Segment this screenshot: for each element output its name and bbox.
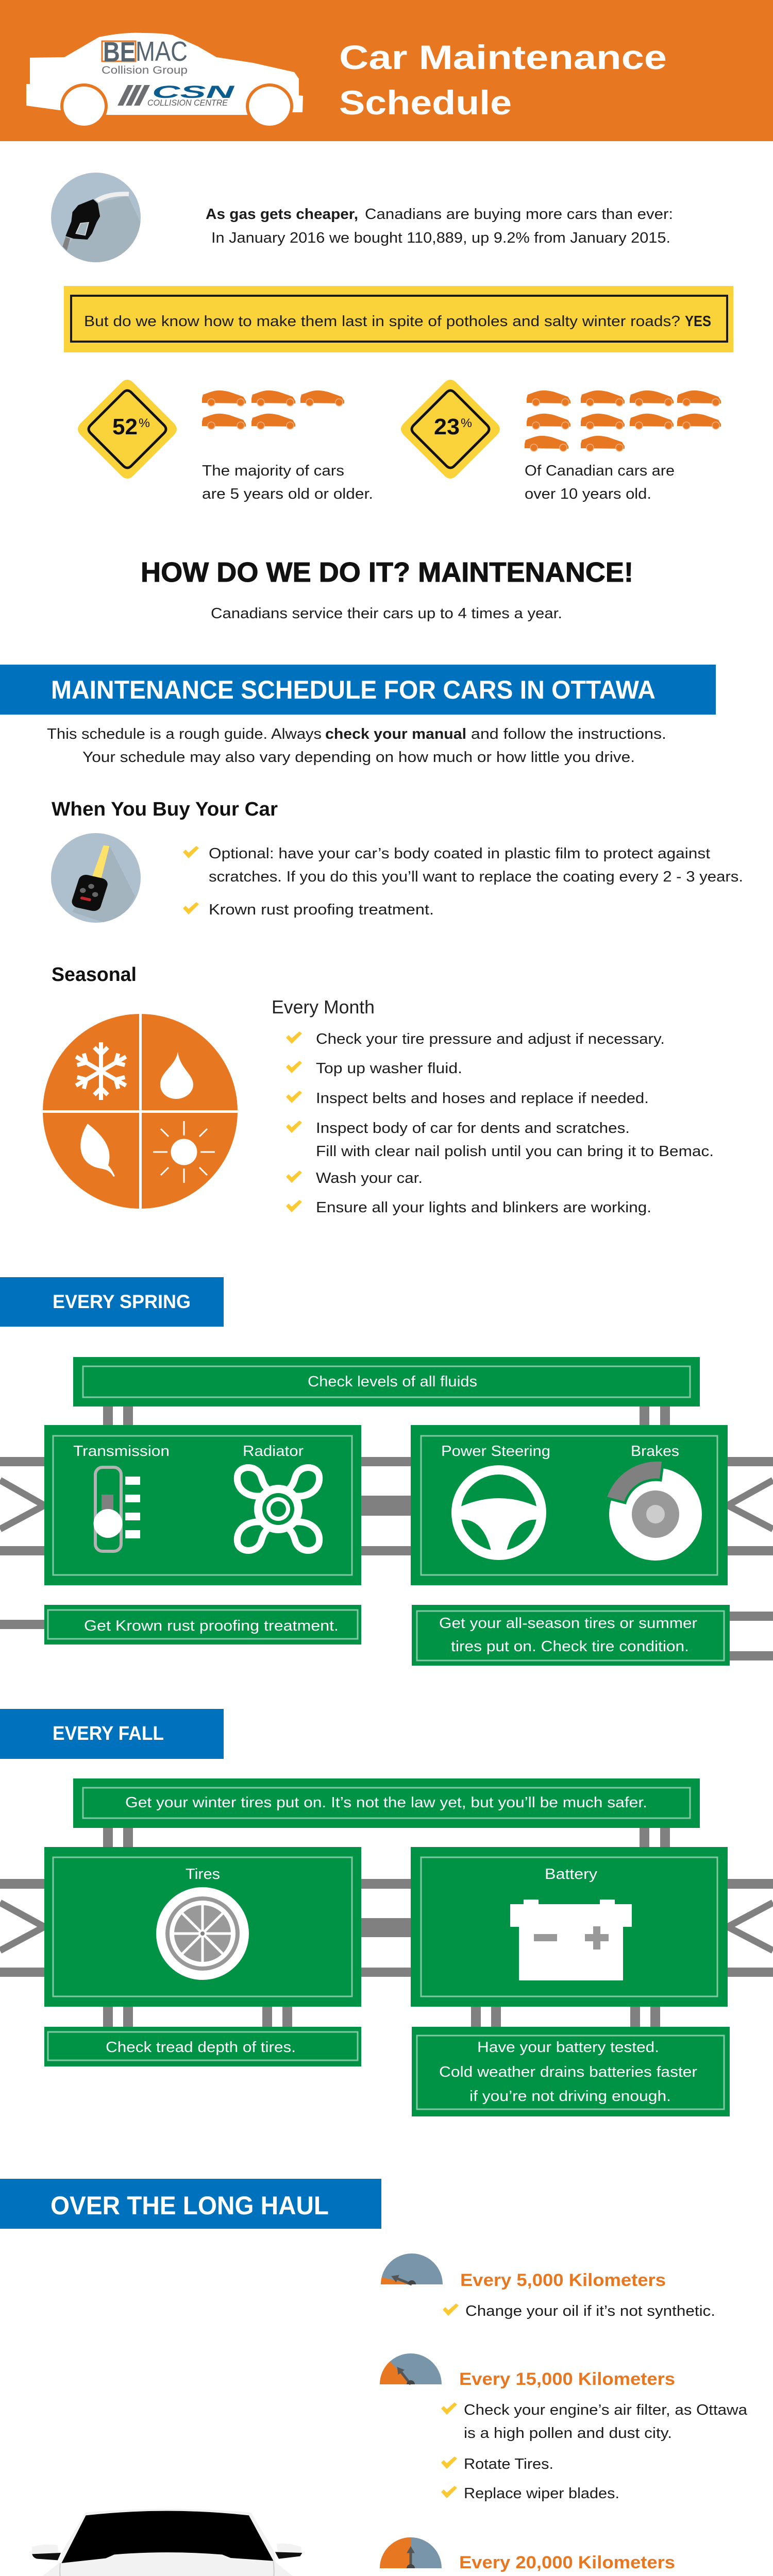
stat caption: Of Canadian cars are [525,463,675,479]
spring highway sign structure [0,1406,773,1660]
sign: battery test: Have your battery tested. [477,2039,659,2056]
check item: wash: Wash your car. [316,1170,423,1187]
sign: transmission and radiator [44,1425,361,1585]
banner: maintenance schedule: MAINTENANCE SCHEDULE FOR CARS IN OTTAWA [51,675,656,704]
heading: how do we do it: HOW DO WE DO IT? MAINTENANCE! [141,557,633,588]
schedule intro text: and follow the instructions. [471,726,666,742]
stat caption: are 5 years old or older. [202,486,373,502]
title [339,38,667,122]
heading: seasonal: Seasonal [52,964,137,986]
icon: car pictograms 10 [525,391,721,451]
check item: belts and hoses: Inspect belts and hoses and replace if needed. [316,1090,649,1107]
stat caption [202,463,373,502]
check item: lights: Ensure all your lights and blinkers are working. [316,1199,651,1216]
sign: krown treatment [44,1605,361,1645]
check item: washer fluid: Top up washer fluid. [316,1060,462,1077]
banner: every spring [0,1277,224,1327]
icon: water drop [160,1052,193,1099]
interval: 15,000 km [380,2353,748,2502]
sign: seasonal tires: tires put on. Check tire condition. [451,1638,689,1655]
seasonal four-part circle [42,1013,239,1210]
title: Schedule [339,83,512,122]
check item: plastic film [183,845,743,885]
check item: plastic film: Optional: have your car’s body coated in plastic film to protect against [209,845,710,862]
check item: plastic film: scratches. If you do this you’ll want to replace the coating every 2 - 3 years. [209,869,743,885]
icon: yellow diamond sign 52% [78,380,177,479]
interval: 20,000 km [380,2537,675,2576]
intro text: As gas gets cheaper, [206,206,358,223]
banner: maintenance schedule [0,665,716,715]
label: tires: Tires [186,1866,220,1883]
callout: yellow question band: But do we know how to make them last in spite of potholes and salty winter roads? [84,313,680,330]
stat caption: over 10 years old. [525,486,651,502]
sign: battery [411,1847,728,2007]
icon: snowflake [73,1042,129,1100]
header band [0,0,773,141]
icon: gauge 15,000 [380,2353,442,2386]
sign: seasonal tires [412,1605,730,1666]
sign: battery test: if you’re not driving enough. [469,2088,671,2105]
stat: 23 percent [401,380,721,502]
header car with logos: BE [103,37,136,67]
check item: rust proofing: Krown rust proofing treatment. [209,902,434,918]
sign: check fluids [73,1357,700,1406]
schedule intro text: Your schedule may also vary depending on how much or how little you drive. [82,749,635,766]
intro text: In January 2016 we bought 110,889, up 9.2% from January 2015. [211,230,670,246]
icon: gauge 20,000 [380,2537,442,2568]
interval: 5,000 km [381,2253,715,2319]
check item: air filter: Check your engine’s air filter, as Ottawa [464,2402,748,2418]
heading: when you buy your car: When You Buy Your Car [52,799,278,820]
sign: seasonal tires: Get your all-season tires or summer [439,1615,697,1632]
check item: body inspection: Fill with clear nail polish until you can bring it to Bemac. [316,1143,714,1160]
icon: transmission dipstick [94,1467,140,1551]
check item: body inspection: Inspect body of car for dents and scratches. [316,1120,630,1137]
icon: leaf [80,1124,115,1177]
check item: oil: Change your oil if it’s not synthetic. [465,2303,715,2319]
icon: yellow diamond sign 23% [401,380,500,479]
icon: yellow diamond sign 23%: % [461,416,472,430]
schedule intro text: This schedule is a rough guide. Always [47,726,322,742]
check item: rotate tires: Rotate Tires. [464,2456,553,2472]
icon: brake disc [606,1460,702,1561]
stat caption: The majority of cars [202,463,344,479]
sign: winter tires [73,1778,700,1828]
stat caption [525,463,675,502]
icon: gas pump nozzle [51,173,143,264]
heading: every 15,000 km: Every 15,000 Kilometers [459,2369,675,2389]
check item: air filter [441,2402,748,2442]
icon: gauge 5,000 [381,2253,443,2287]
sign: battery test [412,2027,730,2116]
icon: sun [153,1121,215,1183]
sign: power steering and brakes [411,1425,728,1585]
icon: yellow diamond sign 23%: 23 [434,414,460,439]
header car with logos: MAC [136,36,188,67]
banner: every fall [0,1709,224,1759]
check item: tire pressure: Check your tire pressure and adjust if necessary. [316,1031,665,1047]
sign: tread depth: Check tread depth of tires. [106,2039,296,2056]
title: Car Maintenance [339,38,667,76]
intro text: Canadians are buying more cars than ever: [365,206,673,223]
check item: wiper blades: Replace wiper blades. [464,2485,619,2502]
banner: over the long haul: OVER THE LONG HAUL [51,2191,329,2220]
callout: yellow question band: YES [685,313,711,330]
label: power steering: Power Steering [441,1443,550,1460]
sign: battery test: Cold weather drains batteries faster [439,2064,697,2080]
schedule intro text [47,726,666,766]
label: transmission: Transmission [73,1443,170,1460]
header car with logos: Collision Group [102,64,188,76]
heading: every 20,000 km: Every 20,000 Kilometers [459,2553,675,2572]
illustration: white car front [27,2509,309,2576]
sign: tires [44,1847,361,2007]
header car with logos [26,33,303,129]
icon: battery [510,1900,632,1980]
sub text: Canadians service their cars up to 4 times a year. [211,605,562,622]
heading: every month: Every Month [272,996,375,1018]
sign: krown treatment: Get Krown rust proofing treatment. [84,1618,339,1634]
banner: over the long haul [0,2179,381,2229]
sign: check fluids: Check levels of all fluids [308,1374,477,1390]
label: radiator: Radiator [243,1443,304,1460]
icon: car key [51,833,141,927]
header car with logos: CSN [152,82,236,102]
icon: steering wheel [451,1465,546,1560]
banner: every fall: EVERY FALL [53,1723,164,1744]
sign: winter tires: Get your winter tires put on. It’s not the law yet, but you’ll be much safer. [125,1794,647,1811]
label: battery: Battery [545,1866,598,1883]
sign: tread depth [44,2027,361,2066]
icon: yellow diamond sign 52%: 52 [112,414,138,439]
heading: every 5,000 km: Every 5,000 Kilometers [460,2270,666,2290]
intro text [206,206,673,246]
checklist: every month [286,1031,714,1216]
icon: car pictograms 5 of 10 [202,391,344,429]
checklist: when you buy [183,845,743,918]
stat: 52 percent [78,380,373,502]
banner: every spring: EVERY SPRING [53,1291,191,1312]
check item: air filter: is a high pollen and dust city. [464,2425,672,2442]
schedule intro text: check your manual [325,726,466,742]
header car with logos: COLLISION CENTRE [147,98,228,108]
icon: radiator fan [237,1467,320,1551]
fall highway sign structure [0,1828,773,2027]
icon: yellow diamond sign 52%: % [139,416,150,430]
icon: tire [156,1887,249,1980]
label: brakes: Brakes [631,1443,679,1460]
check item: body inspection [286,1120,714,1160]
callout: yellow question band [64,286,733,352]
